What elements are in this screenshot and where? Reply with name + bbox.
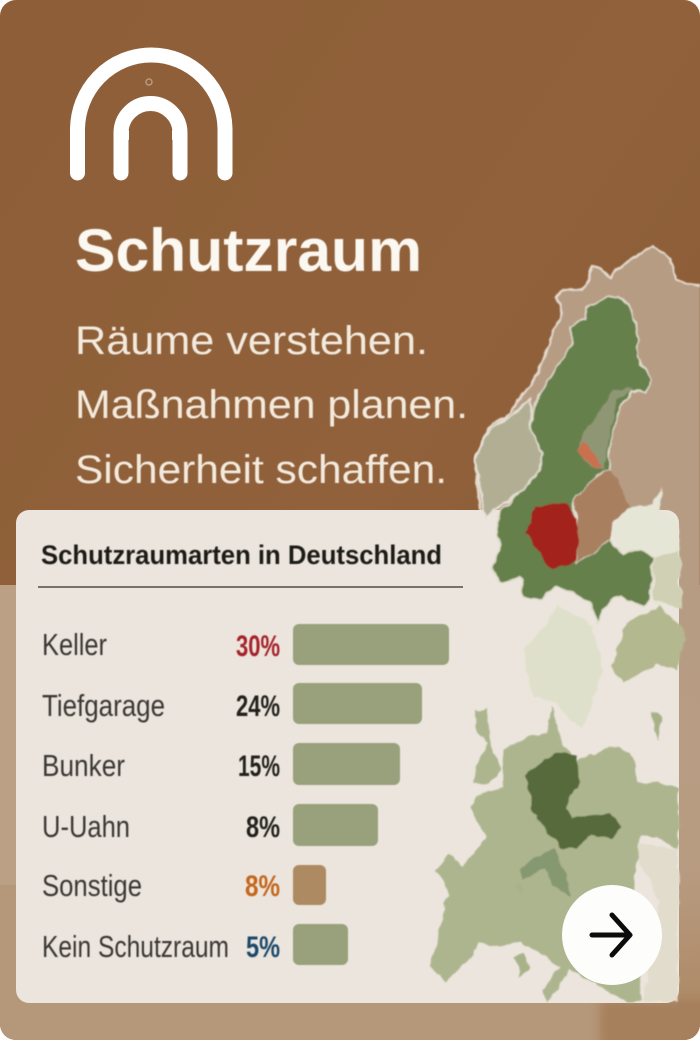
map region: dark green bbox=[527, 753, 620, 848]
row: Tiefgarage bbox=[42, 683, 422, 724]
row: Kein Schutzraum bbox=[42, 924, 348, 965]
map region: brown bbox=[573, 468, 630, 563]
row: Bunker: 15% bbox=[238, 750, 280, 783]
arrow button bbox=[562, 885, 662, 985]
row: Kein Schutzraum: Kein Schutzraum bbox=[42, 929, 229, 964]
row: Keller bbox=[42, 624, 449, 665]
panel heading: Schutzraumarten in Deutschland bbox=[41, 540, 442, 570]
panel: Schutzraumarten bbox=[16, 510, 679, 1003]
map region: white blob bbox=[610, 487, 681, 607]
row: U-Uahn: 8% bbox=[246, 811, 280, 844]
map region: Norway bbox=[475, 398, 542, 518]
tagline: Räume verstehen. bbox=[75, 319, 428, 363]
map region: main green bbox=[430, 707, 678, 1003]
row: Tiefgarage: 24% bbox=[236, 690, 280, 723]
logo: arch icon bbox=[78, 55, 225, 173]
map region: pale centre bbox=[523, 603, 603, 728]
row: U-Uahn: U-Uahn bbox=[42, 809, 130, 844]
map: northern region background bbox=[473, 244, 700, 600]
row: Bunker: Bunker bbox=[42, 748, 125, 783]
map region: UK bbox=[473, 708, 502, 783]
bar chart bbox=[42, 624, 449, 965]
row: Kein Schutzraum: 5% bbox=[246, 931, 280, 964]
map region: mid green bbox=[520, 850, 570, 895]
tagline: Sicherheit schaffen. bbox=[75, 448, 447, 492]
row: Sonstige: Sonstige bbox=[42, 868, 142, 903]
bottom right shade bbox=[600, 1000, 700, 1040]
map region: bottom right pale bbox=[637, 843, 678, 1002]
tagline bbox=[75, 319, 468, 492]
row: Bunker bbox=[42, 743, 400, 785]
right margin strip bbox=[678, 660, 700, 1040]
row: Keller: Keller bbox=[42, 627, 107, 662]
row: Tiefgarage: Tiefgarage bbox=[42, 688, 165, 723]
map: Scandinavia bbox=[475, 295, 681, 623]
row: Keller: 30% bbox=[236, 630, 280, 663]
map region: red bbox=[527, 503, 578, 571]
map region: Gulf bbox=[578, 387, 633, 471]
row: Sonstige: 8% bbox=[245, 870, 280, 903]
tagline: Maßnahmen planen. bbox=[75, 383, 468, 427]
map region: Gulf orange bbox=[578, 440, 603, 469]
map region: islands bbox=[515, 712, 662, 977]
row: Sonstige bbox=[42, 865, 326, 905]
map region: Sweden bbox=[490, 295, 653, 623]
title: Schutzraum bbox=[75, 217, 422, 284]
map region: pale green strip bbox=[653, 552, 680, 608]
map: central and southern region bbox=[430, 603, 687, 1003]
row: U-Uahn bbox=[42, 804, 378, 846]
map region: right green bbox=[612, 607, 687, 683]
